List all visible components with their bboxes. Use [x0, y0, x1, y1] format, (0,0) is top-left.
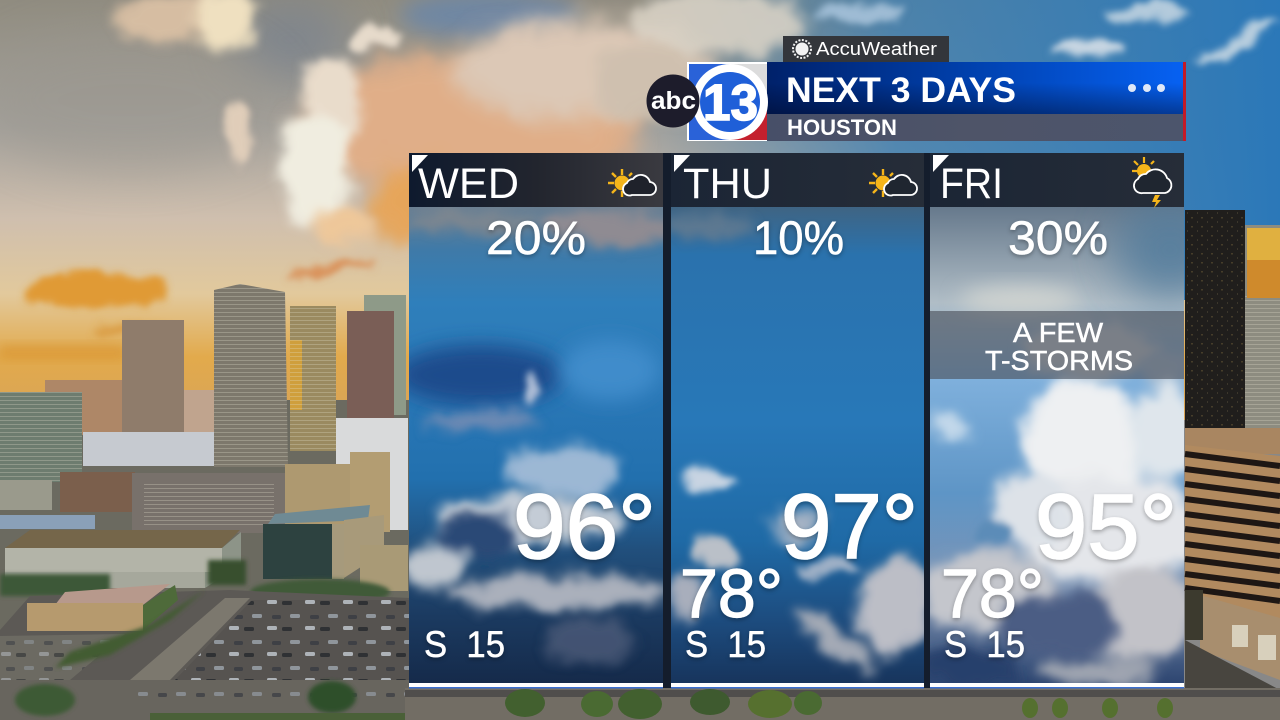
icon: sun, cloud and lightning — [1132, 157, 1171, 208]
day label: FRI — [940, 160, 1003, 208]
AccuWeather tab — [783, 36, 949, 62]
red edge — [1183, 62, 1186, 141]
panel: Thursday — [665, 153, 931, 688]
header: FRI — [930, 153, 1184, 207]
precipitation chance: 30% — [1008, 211, 1108, 264]
header: THU — [671, 153, 924, 207]
background sky with sunset clouds — [0, 0, 1280, 420]
city skyline left — [0, 284, 410, 720]
wind: S 15 — [944, 624, 1025, 665]
header block — [646, 36, 1186, 141]
gaps between panels — [663, 153, 930, 688]
bottom strip — [930, 683, 1184, 688]
panel photo: Friday sky — [930, 207, 1184, 683]
bottom strip — [409, 683, 663, 688]
corner marker — [674, 155, 690, 172]
wind: S 15 — [424, 624, 505, 665]
city skyline right — [1185, 210, 1280, 720]
day label: THU — [683, 160, 772, 208]
low temperature: 78° — [941, 555, 1044, 632]
high temperature: 97° — [781, 476, 918, 578]
precipitation chance: 10% — [753, 211, 844, 264]
title bar — [767, 62, 1183, 114]
wind: S 15 — [685, 624, 766, 665]
logo: 13 — [687, 62, 768, 141]
day label: WED — [418, 160, 519, 208]
road and trees under the panels — [405, 688, 1280, 720]
corner marker — [412, 155, 428, 172]
menu dots — [1128, 84, 1165, 92]
condition line 1: A FEW — [1013, 317, 1104, 348]
title: NEXT 3 DAYS — [786, 71, 1016, 110]
panel: Friday — [920, 153, 1225, 690]
bottom strip — [671, 683, 924, 688]
header: WED — [409, 153, 663, 207]
logo: abc: abc — [651, 87, 696, 115]
icon: sun and cloud — [608, 169, 656, 197]
logo: abc — [646, 74, 700, 128]
logo: 13: 13 — [703, 74, 758, 131]
AccuWeather tab: AccuWeather — [816, 39, 937, 59]
icon: sun and cloud — [869, 169, 917, 197]
location bar: HOUSTON — [787, 115, 897, 140]
condition band — [930, 311, 1184, 379]
panel photo: Wednesday sky — [409, 207, 663, 683]
corner marker — [933, 155, 949, 172]
precipitation chance: 20% — [486, 211, 586, 264]
panel: Wednesday — [395, 153, 682, 688]
location bar — [767, 114, 1183, 141]
condition line 2: T-STORMS — [985, 345, 1133, 376]
panel photo: Thursday sky — [665, 207, 931, 684]
high temperature: 96° — [513, 476, 656, 578]
low temperature: 78° — [680, 555, 783, 632]
high temperature: 95° — [1035, 476, 1177, 578]
